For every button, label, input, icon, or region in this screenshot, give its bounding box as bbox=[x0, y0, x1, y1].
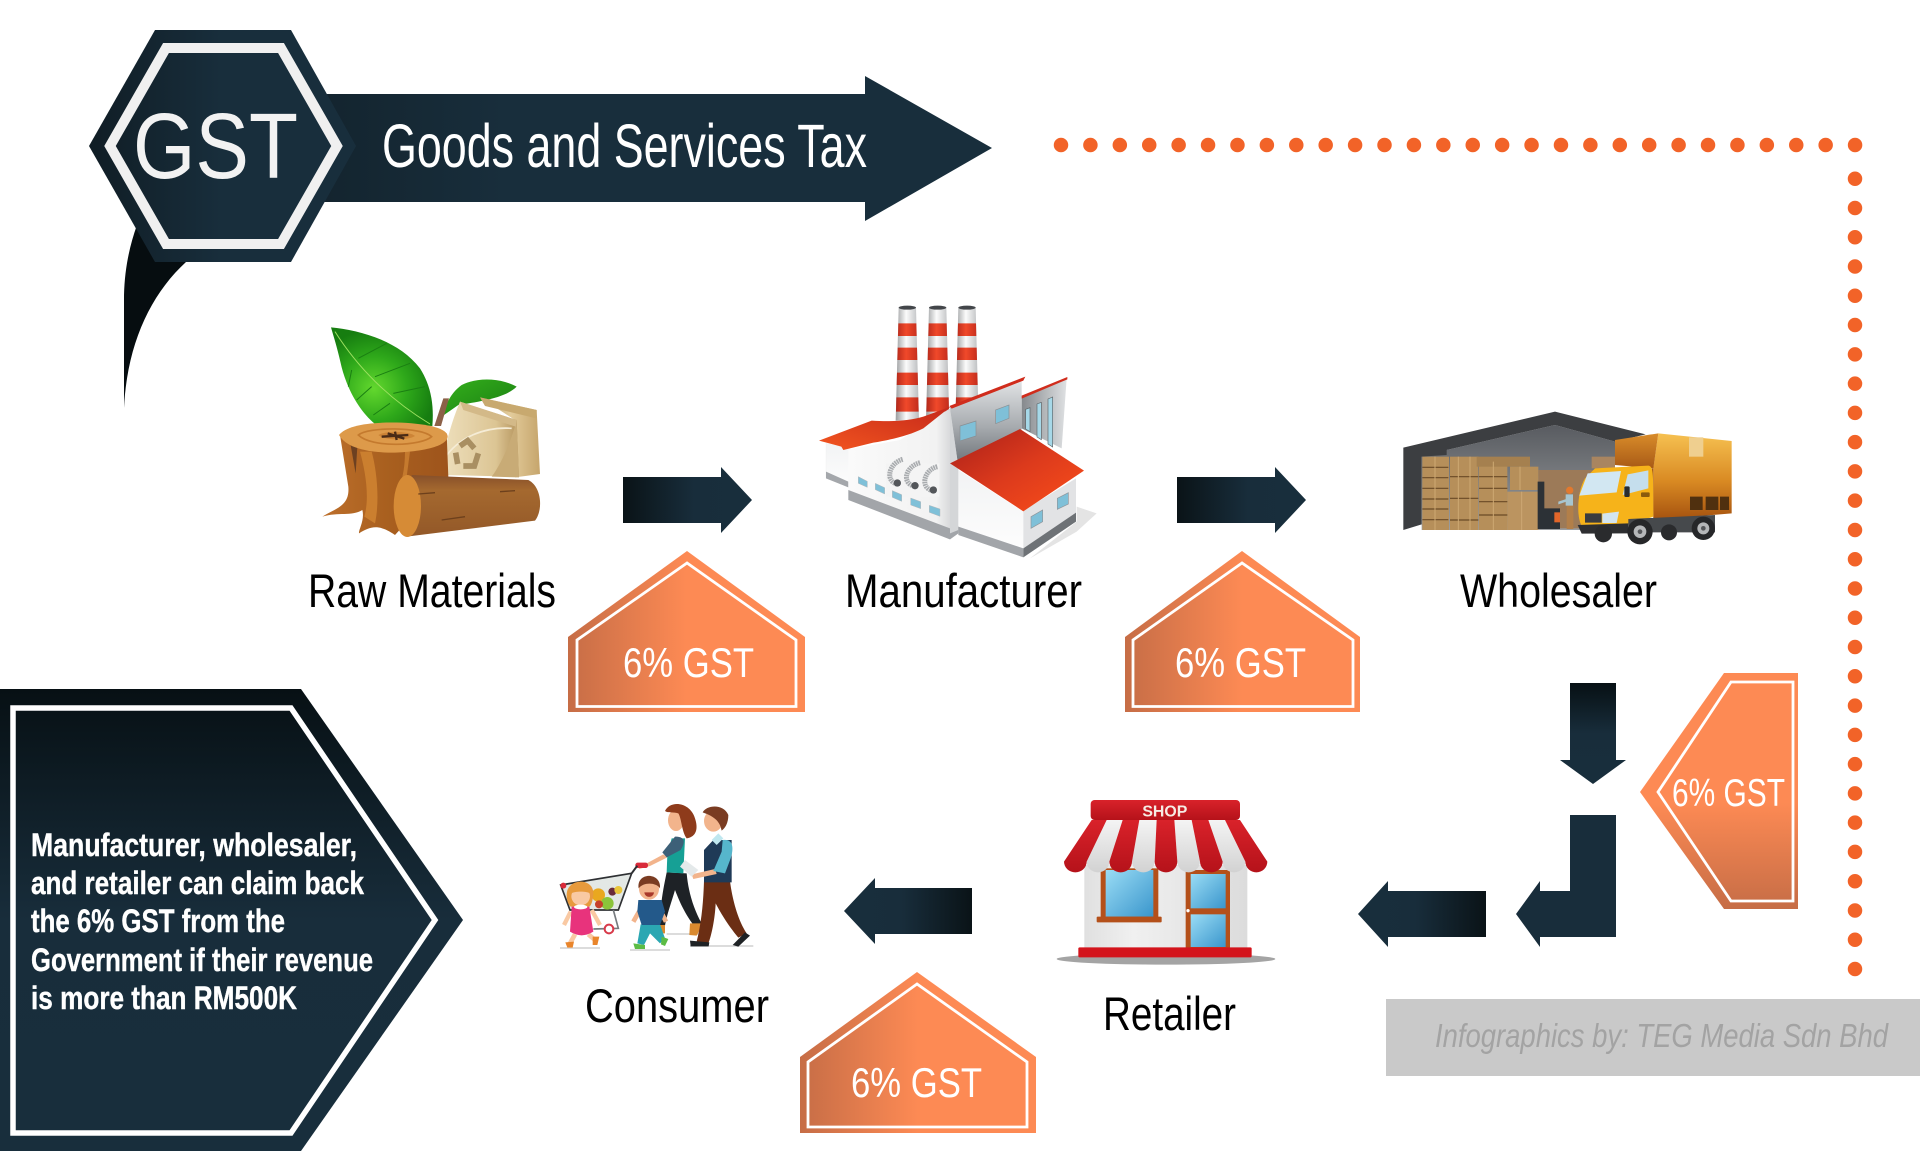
icon: warehouse and truck bbox=[1403, 412, 1732, 544]
callout text bbox=[31, 827, 373, 1016]
paper bags bbox=[442, 397, 540, 477]
grey side wall bbox=[949, 377, 1025, 463]
truck chassis and wheels bbox=[1595, 515, 1715, 544]
shop awning bbox=[1064, 800, 1267, 872]
man bbox=[680, 807, 750, 947]
forklift and worker bbox=[1538, 482, 1573, 529]
callout: input tax claim panel bbox=[0, 689, 463, 1151]
label: Consumer: Consumer bbox=[585, 979, 769, 1032]
banner: GST header bbox=[89, 30, 992, 408]
gst tag 3: side bbox=[1640, 673, 1798, 909]
icon: raw materials bbox=[322, 327, 540, 537]
boy bbox=[633, 876, 668, 949]
chimneys bbox=[896, 306, 979, 421]
label: Manufacturer: Manufacturer bbox=[845, 564, 1082, 617]
far tower bbox=[1021, 377, 1067, 448]
main roof bbox=[819, 407, 951, 450]
front building bbox=[958, 470, 1097, 558]
callout text: the 6% GST from the bbox=[31, 903, 285, 939]
shop sign text: SHOP bbox=[1142, 803, 1187, 820]
arrow: raw materials to manufacturer bbox=[623, 467, 752, 533]
arrow: retailer to consumer bbox=[844, 878, 972, 944]
gst tag 4: 6% GST bbox=[851, 1059, 982, 1106]
banner title: Goods and Services Tax bbox=[382, 112, 867, 180]
credit bar bbox=[1386, 999, 1920, 1076]
shop walls bbox=[1084, 865, 1247, 948]
label: Retailer: Retailer bbox=[1103, 987, 1236, 1040]
gst tag 3: side: 6% GST bbox=[1672, 772, 1785, 815]
arrow: towards retailer bbox=[1358, 881, 1486, 947]
warehouse bbox=[1403, 412, 1646, 530]
gst tag 2: 6% GST bbox=[1175, 639, 1306, 686]
banner arrow bbox=[300, 76, 992, 221]
hexagon badge: GST bbox=[133, 94, 298, 198]
girl bbox=[564, 882, 600, 948]
machinery coils bbox=[886, 459, 939, 497]
gst tag 1 bbox=[568, 551, 805, 712]
dotted orange line bbox=[1061, 145, 1856, 969]
hexagon tail bbox=[124, 225, 186, 408]
stacked boxes bbox=[1422, 457, 1615, 530]
label: Raw Materials: Raw Materials bbox=[308, 564, 556, 617]
callout text: Manufacturer, wholesaler, bbox=[31, 827, 357, 863]
left wing bbox=[826, 443, 849, 487]
icon: shopping family bbox=[560, 804, 753, 950]
shop door bbox=[1186, 870, 1230, 948]
callout text: and retailer can claim back bbox=[31, 865, 364, 901]
small leaf bbox=[442, 380, 517, 417]
shop window bbox=[1097, 868, 1162, 922]
gst tag 4 bbox=[800, 972, 1036, 1133]
tree stump bbox=[322, 422, 448, 535]
gst tag 1: 6% GST bbox=[623, 639, 754, 686]
shopping cart bbox=[560, 866, 637, 933]
arrow: wholesaler down bbox=[1560, 683, 1626, 784]
icon: shop bbox=[1057, 800, 1275, 965]
truck cargo bbox=[1615, 433, 1732, 520]
icon: factory bbox=[819, 306, 1097, 558]
woman bbox=[635, 804, 703, 936]
arrow: elbow to retailer bbox=[1516, 815, 1616, 947]
label: Wholesaler: Wholesaler bbox=[1460, 564, 1657, 617]
big leaf bbox=[331, 327, 433, 426]
truck cab bbox=[1578, 466, 1653, 534]
gst tag 2 bbox=[1125, 551, 1360, 712]
arrow: manufacturer to wholesaler bbox=[1177, 467, 1306, 533]
shop base bbox=[1078, 947, 1252, 957]
callout text: is more than RM500K bbox=[31, 980, 297, 1016]
log bbox=[394, 475, 540, 537]
front roof bbox=[950, 429, 1084, 511]
main body bbox=[848, 408, 958, 539]
lower windows bbox=[858, 477, 940, 516]
hexagon badge bbox=[89, 30, 356, 262]
callout text: Government if their revenue bbox=[31, 942, 373, 978]
